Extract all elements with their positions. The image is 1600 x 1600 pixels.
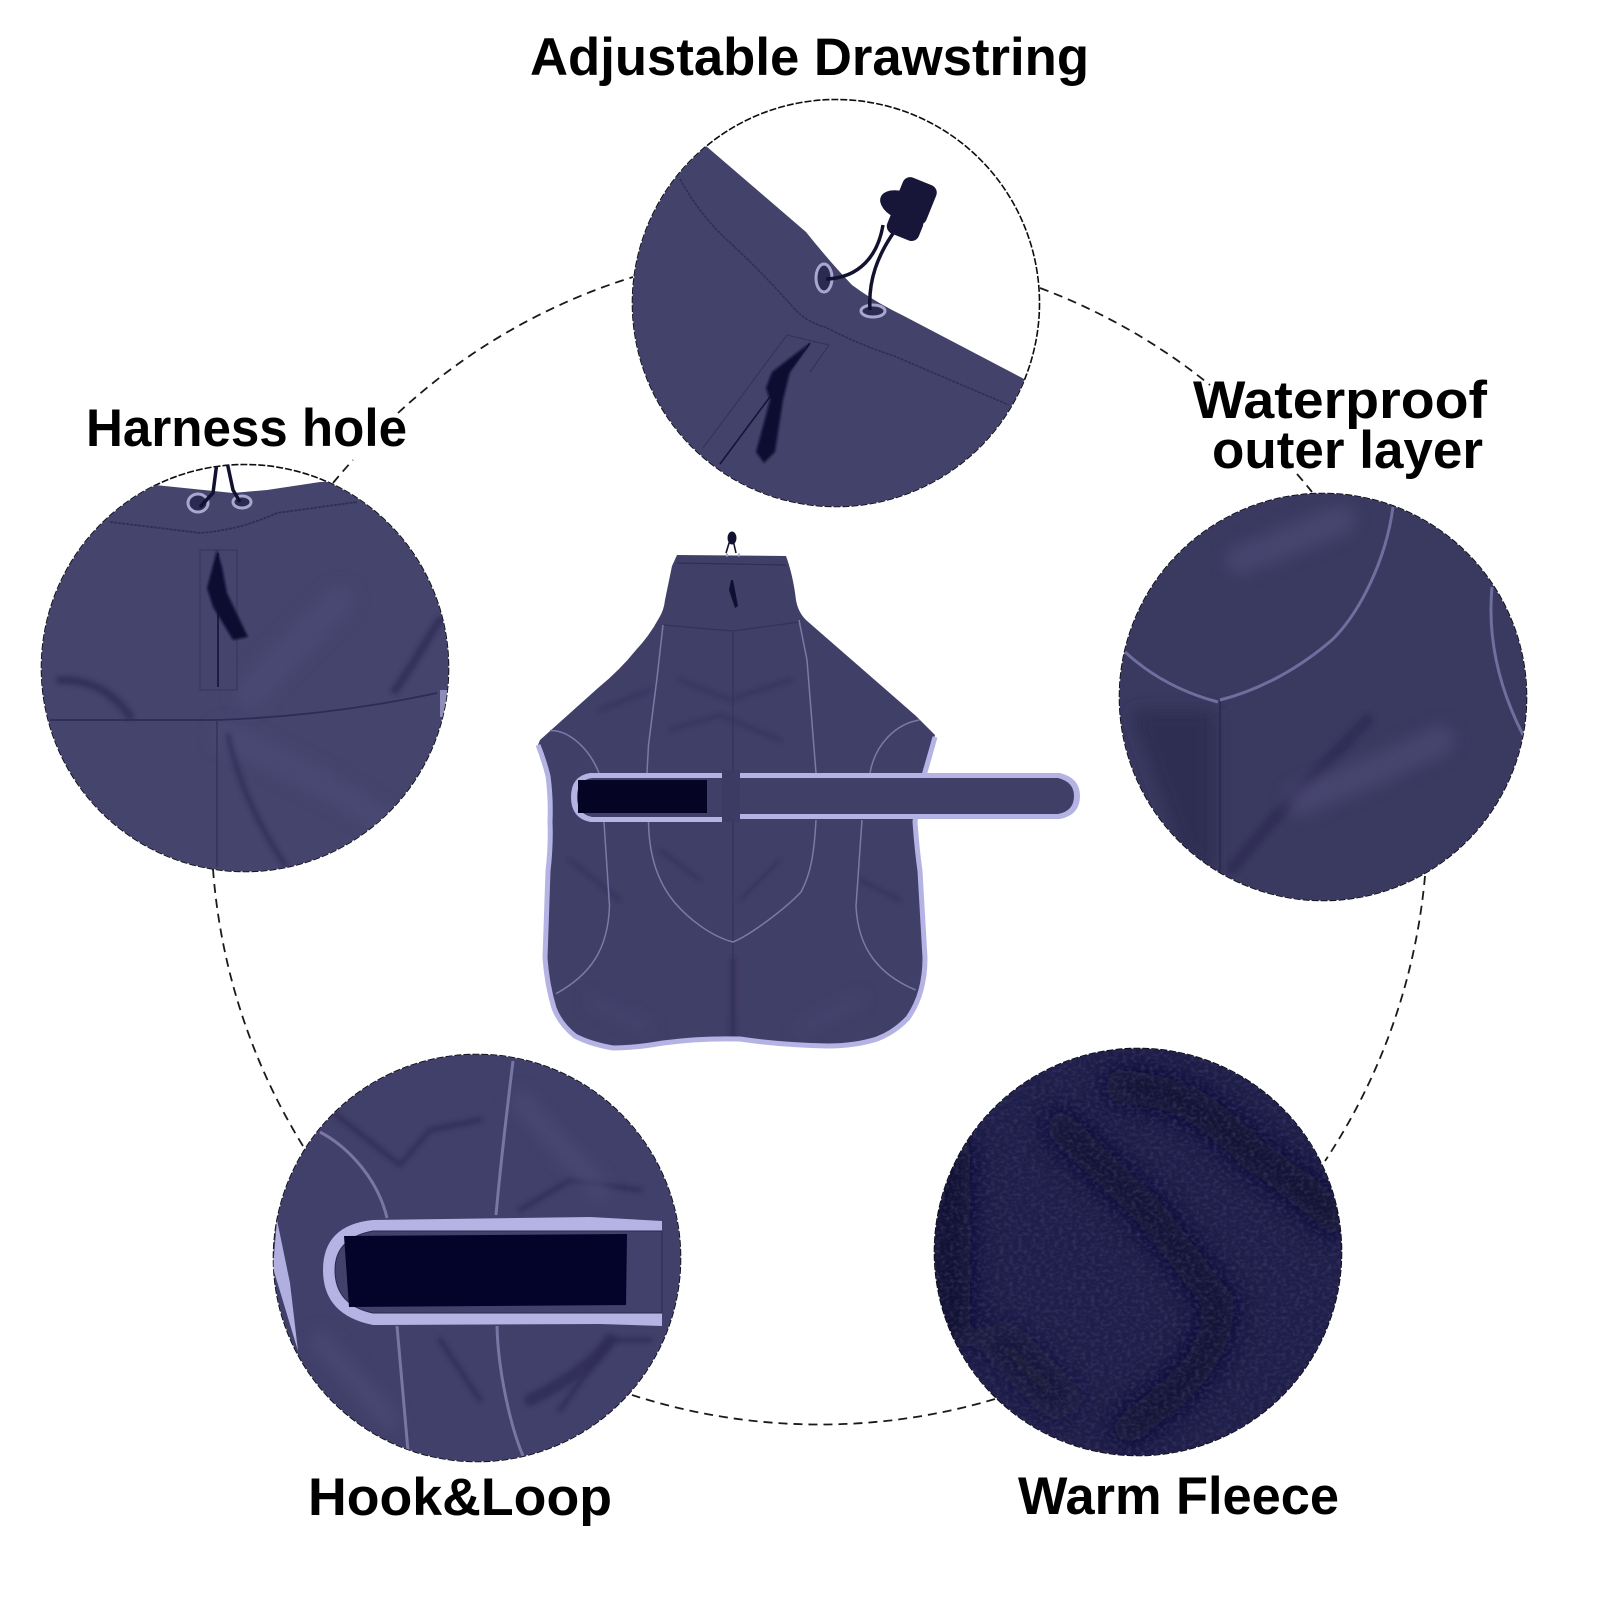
dashed connecting ring bbox=[213, 277, 1425, 1425]
heading: adjustable drawstring: Adjustable Drawstring bbox=[530, 28, 1089, 87]
strap long section bbox=[740, 773, 1080, 819]
strap left section bbox=[571, 773, 722, 822]
panel: harness hole detail bbox=[40, 464, 450, 872]
fabric shading bbox=[1130, 520, 1440, 880]
coat body bbox=[538, 555, 935, 1048]
strap edge binding bbox=[323, 1217, 662, 1326]
zipper pull bbox=[756, 343, 810, 463]
zipper pull bbox=[207, 550, 248, 640]
eyelets bbox=[726, 554, 740, 556]
eyelet left bbox=[816, 264, 832, 292]
centre seam bbox=[1219, 702, 1221, 876]
toggle cap bbox=[728, 532, 736, 544]
reflective piping bbox=[320, 1061, 523, 1456]
fabric wrinkles bbox=[320, 1100, 650, 1420]
yoke seam bbox=[663, 622, 799, 631]
reflective piping curve bbox=[1220, 507, 1393, 700]
strap inner fabric bbox=[335, 1231, 662, 1313]
cord toggle bbox=[880, 177, 937, 241]
top seam bbox=[110, 502, 357, 533]
panel: warm fleece detail bbox=[925, 1040, 1350, 1465]
lavender edge trim bbox=[538, 737, 935, 1048]
reflective piping left bbox=[1125, 652, 1218, 702]
heading: hook and loop: Hook&Loop bbox=[308, 1468, 612, 1527]
central coat illustration bbox=[538, 532, 1080, 1048]
zipper line bbox=[720, 343, 810, 464]
heading: warm fleece: Warm Fleece bbox=[1018, 1467, 1339, 1526]
heading: waterproof outer layer: Waterproof bbox=[1193, 371, 1487, 430]
belt loop bbox=[722, 770, 740, 822]
heading: waterproof outer layer: outer layer bbox=[1212, 421, 1483, 480]
coat fabric bbox=[265, 1045, 690, 1470]
eyelet right bbox=[861, 305, 885, 317]
hook and loop patch bbox=[344, 1234, 627, 1307]
coat fabric bbox=[1110, 485, 1540, 910]
eyelets bbox=[188, 494, 208, 512]
panel: hook and loop detail bbox=[265, 1045, 690, 1470]
zipper placket bbox=[703, 335, 829, 448]
drawstring toggle bbox=[726, 540, 736, 553]
drawstring cords bbox=[826, 225, 894, 310]
fabric shading bbox=[60, 600, 440, 865]
reflective piping bbox=[550, 620, 920, 994]
collar fabric bbox=[632, 146, 1024, 506]
reflective piping right bbox=[1491, 587, 1523, 735]
drawstring cords bbox=[200, 462, 240, 507]
strap long inner bbox=[740, 778, 1074, 814]
centre seam bbox=[216, 720, 218, 867]
centre seam bbox=[732, 631, 734, 1040]
heading: harness hole: Harness hole bbox=[86, 399, 407, 458]
fleece folds bbox=[950, 1086, 1335, 1429]
coat fabric bbox=[42, 482, 448, 872]
strap left inner bbox=[577, 778, 722, 817]
horizontal yoke seam bbox=[50, 693, 437, 720]
fleece texture bbox=[925, 1040, 1350, 1465]
zipper pull bbox=[729, 580, 738, 608]
hook and loop patch on strap bbox=[578, 780, 707, 813]
zipper placket bbox=[200, 550, 237, 690]
trim speck bbox=[440, 690, 448, 717]
collar seam bbox=[680, 179, 1009, 405]
coat wrinkles bbox=[570, 680, 900, 1040]
panel: adjustable drawstring detail bbox=[632, 98, 1040, 508]
panel: waterproof outer layer detail bbox=[1110, 485, 1540, 910]
collar seam bbox=[677, 563, 786, 565]
eyelet right bbox=[233, 496, 251, 508]
side trim bbox=[273, 1220, 298, 1351]
heading: waterproof outer layer bbox=[1193, 371, 1487, 480]
zipper line bbox=[217, 553, 219, 687]
fleece base bbox=[925, 1040, 1350, 1465]
